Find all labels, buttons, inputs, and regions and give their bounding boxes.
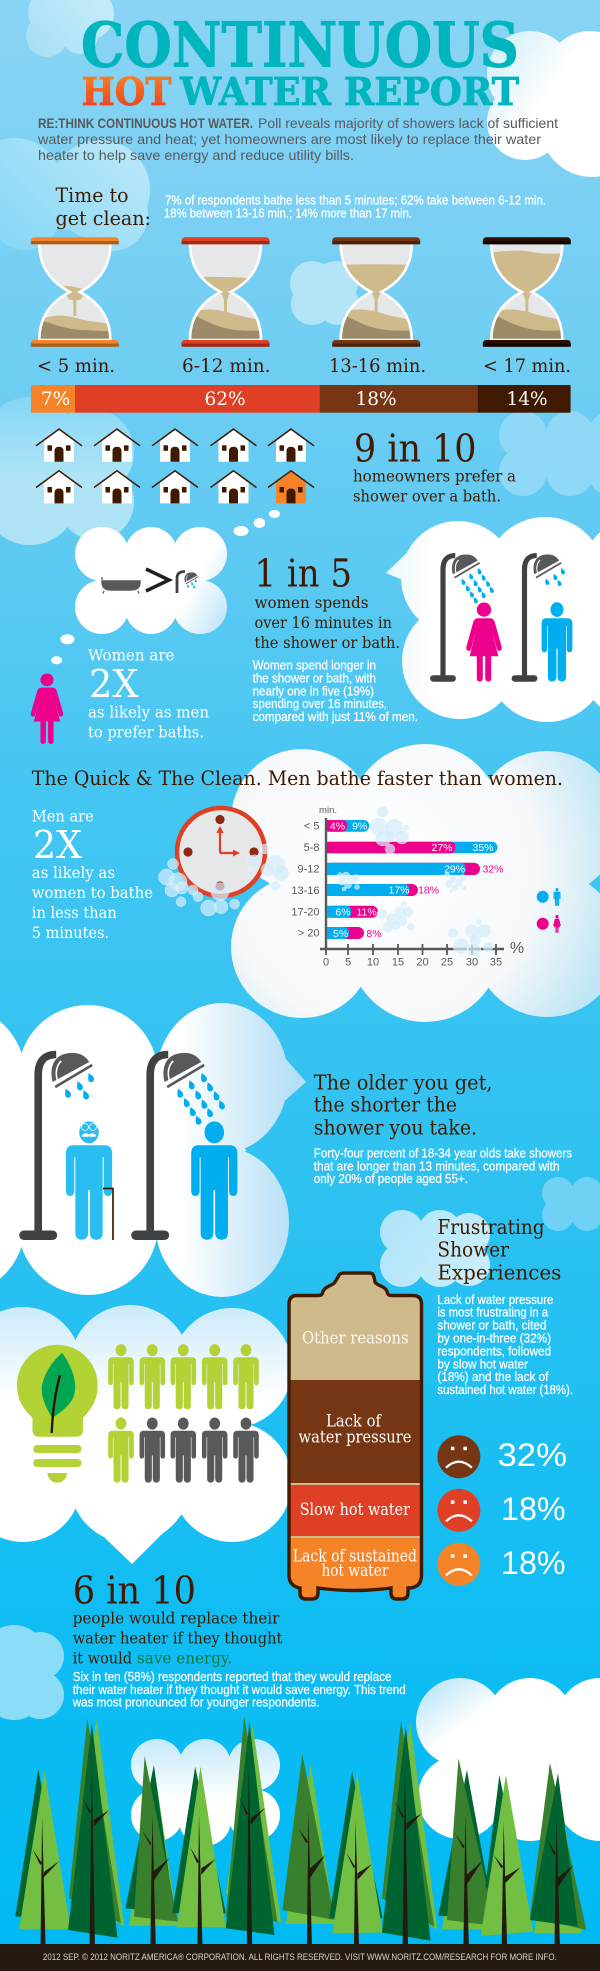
x axis labels: 5: [345, 957, 351, 969]
text: men 2x: in less than: [32, 904, 117, 922]
row: 9 to 12: 29%: [444, 864, 465, 876]
text: women 2x: [88, 647, 209, 741]
glasses and moustache: [82, 1124, 96, 1136]
text: 1 in 5: women spends: [254, 594, 369, 612]
icon: woman: [31, 674, 63, 744]
text: the older you get: shower you take.: [314, 1115, 477, 1139]
icon: light bulb with leaf: [17, 1345, 98, 1483]
cloud: showers speech bubble: [386, 517, 600, 722]
text: women spend longer: compared with just 11% of men.: [253, 710, 418, 724]
hourglass: 13-16 min: [332, 237, 420, 347]
row: under 5: 9%: [352, 820, 367, 832]
cloud: older showers speech bubble: [0, 1003, 306, 1297]
frown face: 18 percent slow: [437, 1489, 480, 1532]
percentages: 18%: [501, 1545, 566, 1581]
hourglass labels: [37, 356, 571, 377]
tree 7: [329, 1772, 383, 1945]
text: the older you get: [314, 1070, 492, 1139]
row: 17 to 20: 6%: [335, 906, 351, 918]
icon: shower over man: [512, 555, 572, 682]
chart axes: [320, 818, 504, 955]
tree 5: [226, 1716, 281, 1945]
tank label: lack of sustained hot water: hot water: [322, 1561, 388, 1580]
text: 1 in 5: 1 in 5: [254, 552, 352, 596]
row: over 20: 8%: [366, 928, 382, 940]
tank label: lack of sustained hot water: [293, 1547, 417, 1580]
heading: time to get clean: Time to: [56, 184, 128, 207]
y axis labels: 13-16: [291, 885, 320, 897]
bar chart: bathing time by gender: [291, 805, 524, 969]
intro text: water pressure and heat; yet homeowners are most likely to replace their water: [37, 131, 541, 147]
x axis labels: 25: [441, 957, 453, 969]
frown face: 32 percent: [437, 1435, 480, 1478]
row: under 5: 4%: [330, 820, 345, 832]
text: men 2x: 5 minutes.: [32, 924, 109, 942]
text: lack of water pressure: Lack of water pressure: [437, 1293, 553, 1307]
text: 9 in 10: 9 in 10: [354, 427, 476, 471]
tank label: lack of water pressure: water pressure: [298, 1427, 411, 1446]
text: women spend longer: spending over 16 minutes,: [253, 697, 387, 711]
cloud: chart panel: [231, 744, 600, 1022]
text: six in ten: [72, 1670, 406, 1710]
percentages: 18%: [501, 1491, 566, 1527]
hourglass: 17 min: [483, 237, 571, 347]
tree 2: [68, 1718, 124, 1945]
text: men 2x: as likely as: [32, 864, 115, 882]
cloud: upper left: [0, 138, 150, 251]
row: 13 to 16: 17%: [388, 885, 410, 897]
heading: frustrating shower experiences: [437, 1215, 561, 1284]
cloud: right of houses: [499, 411, 600, 496]
tank label: slow hot water: Slow hot water: [300, 1500, 410, 1519]
stacked percentage bar: 14%: [506, 389, 548, 410]
tank label: lack of sustained hot water: Lack of sustained: [293, 1547, 417, 1566]
text: 9 in 10: [353, 427, 516, 506]
text: lack of water pressure: is most frustrating in a: [437, 1306, 548, 1320]
tree 11: [530, 1763, 586, 1945]
title words: water report: WATER REPORT: [179, 70, 519, 115]
text: forty-four percent: [314, 1147, 572, 1186]
cloud: lower left: [0, 1625, 64, 1720]
cloud: lower middle: [131, 1739, 280, 1846]
title word: hot: HOT: [82, 70, 172, 115]
tank label: other reasons: Other reasons: [302, 1328, 409, 1347]
cane: [103, 1188, 113, 1240]
greater than sign: [146, 569, 169, 591]
heading: frustrating shower experiences: Frustrating: [437, 1215, 545, 1239]
icon: small shower: [177, 572, 198, 593]
text: 6 in 10: [73, 1568, 283, 1667]
tree 4: [172, 1767, 226, 1945]
tree 10: [481, 1775, 533, 1945]
x axis labels: 30: [466, 957, 478, 969]
text: women spend longer: [253, 658, 418, 724]
row: 13 to 16: [327, 884, 439, 897]
text: forty-four percent: that are longer than 13 minutes, compared with: [314, 1160, 560, 1174]
text: lack of water pressure: respondents, followed: [437, 1345, 551, 1359]
y axis labels: < 5: [304, 821, 320, 833]
text: the older you get: The older you get,: [314, 1070, 492, 1094]
hourglass labels: 6-12 min.: [182, 356, 270, 377]
text: women 2x: Women are: [88, 647, 174, 665]
tree 6: [282, 1754, 335, 1945]
y axis labels: > 20: [298, 928, 320, 940]
tree 8: [382, 1721, 437, 1945]
icon: clock: [177, 808, 265, 896]
x axis labels: [323, 940, 524, 969]
row: over 20: [327, 927, 382, 940]
icon: people 6 in 10: [108, 1344, 259, 1483]
icon: younger man under long shower: [131, 1053, 237, 1240]
x axis labels: 10: [367, 957, 379, 969]
time summary text: 7% of respondents bathe less than 5 minutes; 62% take between 6-12 min.: [165, 194, 546, 208]
intro text: Poll reveals majority of showers lack of sufficient: [258, 115, 558, 131]
x axis labels: 15: [392, 957, 404, 969]
x axis labels: 0: [323, 957, 329, 969]
soap bubbles around clock: [158, 844, 289, 916]
text: lack of water pressure: shower or bath, cited: [437, 1319, 547, 1333]
cloud: small right: [542, 1177, 600, 1231]
hourglass labels: 13-16 min.: [329, 356, 426, 377]
tree 1: [15, 1769, 71, 1945]
hourglass labels: < 17 min.: [483, 356, 571, 377]
cloud: behind frustrating heading: [380, 1210, 490, 1287]
text: six in ten: their water heater if they thought it would save energy. This trend: [73, 1683, 406, 1697]
thought bubbles lower: [51, 634, 74, 664]
cloud: bath versus shower thought: [75, 527, 227, 634]
heading: frustrating shower experiences: Experiences: [437, 1260, 561, 1284]
row: under 5: [327, 820, 369, 832]
cloud: top left: [26, 0, 114, 57]
forest of trees: [15, 1716, 586, 1945]
hourglass: 6-12 min: [182, 237, 270, 347]
hourglass: less than 5 min: [31, 237, 119, 347]
stacked percentage bar: 7%: [41, 389, 70, 410]
stacked percentage bar: 62%: [204, 389, 246, 410]
hourglass labels: < 5 min.: [37, 356, 115, 377]
row: 9 to 12: [327, 863, 504, 876]
text: women spend longer: nearly one in five (19%): [253, 684, 374, 698]
y axis labels: 9-12: [297, 863, 320, 875]
text: 6 in 10: water heater if they thought: [73, 1629, 283, 1647]
text: women 2x: 2X: [89, 662, 138, 706]
y axis labels: 5-8: [304, 842, 320, 854]
text: men 2x: 2X: [33, 823, 82, 867]
tree 9: [438, 1758, 496, 1945]
intro text: heater to help save energy and reduce utility bills.: [38, 147, 354, 163]
tree 3: [126, 1756, 178, 1945]
text: 6 in 10: it would: [73, 1649, 132, 1667]
row: 5 to 8: 35%: [472, 842, 494, 854]
text: lack of water pressure: (18%) and the lack of: [437, 1370, 549, 1384]
text: the older you get: the shorter the: [314, 1093, 457, 1117]
text: six in ten: Six in ten (58%) respondents reported that they would replace: [73, 1670, 392, 1684]
heading: time to get clean: [56, 184, 151, 230]
text: women spend longer: the shower or bath, with: [253, 671, 376, 685]
text: 9 in 10: shower over a bath.: [353, 488, 501, 506]
title: [81, 8, 519, 115]
heading: time to get clean: get clean:: [56, 207, 151, 230]
y axis labels: 17-20: [291, 907, 320, 919]
y axis labels: [291, 805, 337, 940]
intro text: RE:THINK CONTINUOUS HOT WATER.: [38, 115, 253, 131]
text: 9 in 10: homeowners prefer a: [353, 468, 516, 486]
text: lack of water pressure: sustained hot water (18%).: [437, 1383, 573, 1397]
text: forty-four percent: only 20% of people aged 55+.: [314, 1172, 468, 1186]
icon: bathtub: [101, 580, 141, 591]
heading: frustrating shower experiences: Shower: [437, 1238, 509, 1262]
cloud: bulb panel: [0, 1305, 292, 1564]
houses: 9 in 10: [36, 429, 314, 503]
time summary text: 18% between 13-16 min.; 14% more than 17 min.: [164, 207, 412, 221]
x axis labels: 20: [416, 957, 429, 969]
text: women 2x: to prefer baths.: [88, 723, 204, 741]
percentages: [498, 1437, 567, 1581]
text: women spend longer: Women spend longer in: [253, 658, 376, 672]
row: 17 to 20: 11%: [356, 906, 377, 918]
row: 9 to 12: 32%: [482, 864, 504, 876]
text: 6 in 10: save energy.: [137, 1649, 232, 1667]
text: 6 in 10: people would replace their: [73, 1609, 280, 1627]
stacked percentage bar: 18%: [355, 389, 397, 410]
row: 5 to 8: [327, 842, 498, 854]
row: 13 to 16: 18%: [418, 885, 439, 897]
row: 5 to 8: 27%: [431, 842, 453, 854]
percentages: 32%: [498, 1437, 567, 1473]
icon: bath greater than shower: [101, 569, 198, 594]
cloud: top right: [487, 31, 600, 177]
y axis labels: min.: [319, 805, 337, 816]
x axis labels: %: [510, 940, 524, 957]
tank label: lack of water pressure: Lack of: [326, 1412, 383, 1431]
row: 17 to 20: [327, 906, 378, 918]
text: lack of water pressure: by one-in-three (32%): [437, 1332, 551, 1346]
frown face: 18 percent sustained: [437, 1543, 480, 1586]
icon: older man under short shower: [19, 1053, 113, 1240]
text: 1 in 5: over 16 minutes in: [254, 614, 392, 632]
soap bubbles in chart: [338, 806, 493, 957]
cloud: lower right: [416, 1678, 600, 1841]
text: 1 in 5: the shower or bath.: [254, 634, 400, 652]
tank label: lack of water pressure: [298, 1412, 411, 1446]
thought bubbles upper: [234, 510, 280, 536]
text: 6 in 10: 6 in 10: [73, 1568, 196, 1612]
text: men 2x: [32, 808, 153, 942]
cloud: behind hourglass: [290, 261, 359, 325]
text: six in ten: was most pronounced for younger respondents.: [72, 1696, 320, 1710]
text: lack of water pressure: [437, 1293, 573, 1397]
text: 1 in 5: [254, 552, 400, 652]
cloud: lower left behind houses: [0, 397, 134, 545]
text: men 2x: Men are: [32, 808, 94, 826]
text: forty-four percent: Forty-four percent of 18-34 year olds take showers: [314, 1147, 572, 1161]
icon: shower over woman: [430, 555, 502, 682]
text: women 2x: as likely as men: [88, 704, 209, 722]
title line: continuous: CONTINUOUS: [81, 8, 519, 82]
text: men 2x: women to bathe: [32, 884, 153, 902]
water heater tank: [285, 1270, 427, 1603]
heading: the quick and the clean: The Quick & The Clean. Men bathe faster than women.: [32, 766, 563, 790]
text: lack of water pressure: by slow hot water: [437, 1358, 528, 1372]
stacked percentage bar: [31, 385, 571, 413]
chart legend: [537, 888, 561, 933]
x axis labels: 35: [490, 957, 502, 969]
row: over 20: 5%: [333, 928, 348, 940]
time summary text: [164, 194, 546, 221]
intro text: [37, 115, 558, 163]
footer bar: [0, 1944, 600, 1971]
